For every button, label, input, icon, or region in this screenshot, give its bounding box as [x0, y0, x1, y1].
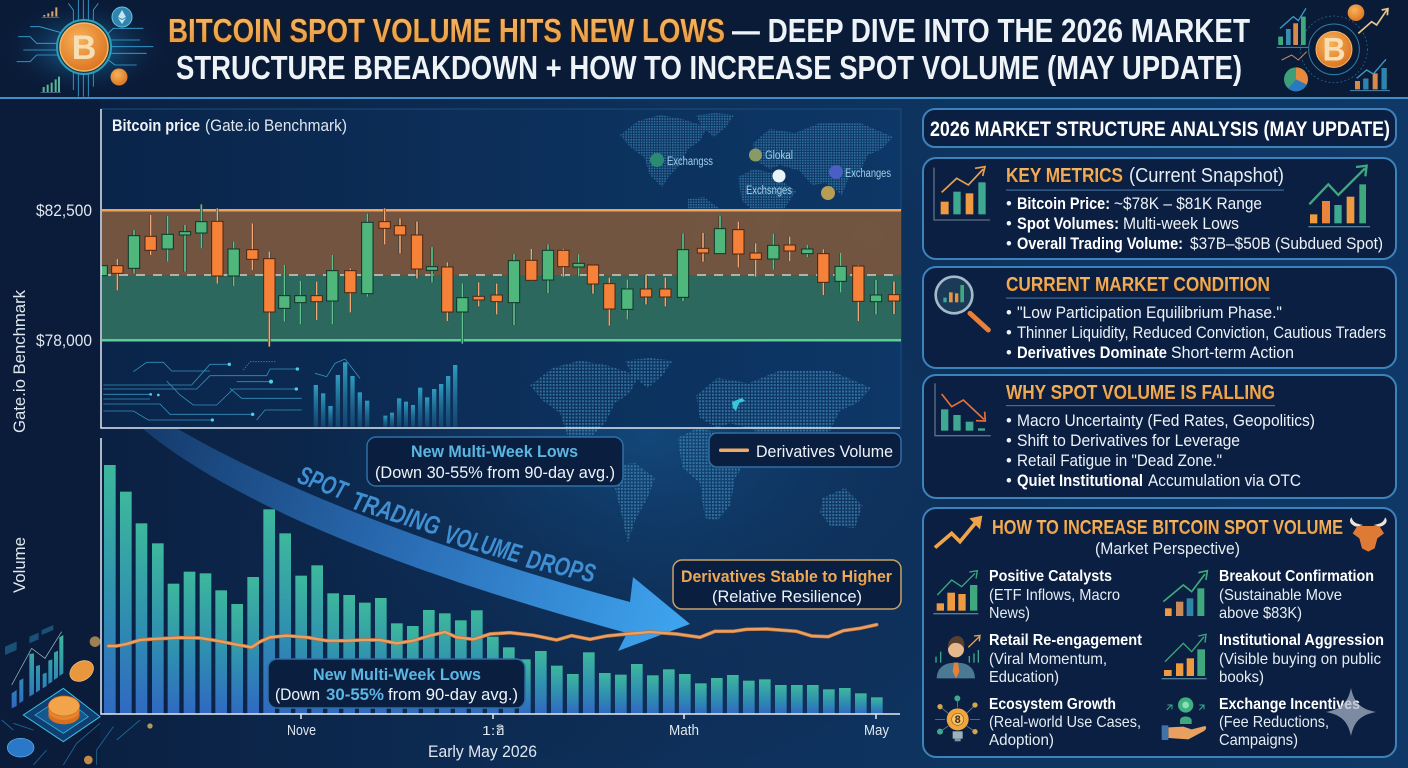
heading: KEY METRICS: [1006, 165, 1123, 187]
header icon: bitcoin and analytics: B: [1322, 32, 1346, 68]
price axis labels: [10, 201, 92, 433]
callout: new multi-week lows, lower: 30-55%: [326, 686, 384, 704]
line: derivatives volume: [108, 625, 877, 647]
reason lines: Macro Uncertainty (Fed Rates, Geopolitics): [1017, 412, 1315, 430]
metric lines: Bitcoin Price:: [1017, 195, 1110, 213]
dotted world map with exchange markers: Exchsnges: [746, 185, 792, 197]
title: BITCOIN SPOT VOLUME HITS NEW LOWS: [168, 12, 725, 49]
item: positive catalysts: (ETF Inflows, Macro: [989, 587, 1120, 604]
heading: CURRENT MARKET CONDITION: [1006, 274, 1270, 296]
item: institutional aggression: (Visible buying on public: [1219, 651, 1381, 668]
metric lines: [1006, 195, 1383, 253]
condition lines: •: [1006, 344, 1012, 362]
dotted world map with exchange markers: Glokal: [765, 150, 793, 162]
item: exchange incentives: (Fee Reductions,: [1219, 714, 1329, 731]
metric lines: ~$78K – $81K Range: [1114, 195, 1262, 213]
reason lines: [1006, 412, 1315, 490]
item: retail re-engagement: Education): [989, 669, 1059, 686]
panel: why spot volume is falling: [923, 375, 1396, 498]
icon: rising bar chart: [934, 167, 990, 220]
legend: derivatives volume: [709, 433, 901, 467]
item: positive catalysts: Positive Catalysts: [989, 568, 1112, 585]
dotted world map with exchange markers: Exchangss: [667, 156, 713, 168]
circuit traces and mini bars: [103, 359, 457, 427]
condition lines: •: [1006, 304, 1012, 322]
metric lines: •: [1006, 195, 1012, 213]
condition lines: [1006, 304, 1386, 362]
icon: bull: [1350, 517, 1387, 552]
callout: new multi-week lows, upper: [367, 437, 623, 486]
chart heading: [112, 117, 347, 135]
item: ecosystem growth: Ecosystem Growth: [989, 696, 1116, 713]
icon: magnifier: [936, 277, 988, 330]
metric lines: $37B–$50B (Subdued Spot): [1190, 235, 1383, 253]
heading: [1006, 165, 1284, 191]
icon: falling bars: [935, 383, 991, 436]
metric lines: Multi-week Lows: [1123, 215, 1239, 233]
item: ecosystem growth: [935, 695, 1141, 749]
item: exchange incentives: Campaigns): [1219, 732, 1298, 749]
x axis labels: Nove: [287, 723, 316, 739]
callout: derivatives stable to higher: [673, 560, 901, 609]
header icon: bitcoin circuit: [0, 0, 170, 97]
item: ecosystem growth: 8: [955, 714, 961, 726]
x axis labels: [287, 723, 890, 761]
item: retail re-engagement: (Viral Momentum,: [989, 651, 1107, 668]
chart heading: (Gate.io Benchmark): [205, 117, 347, 135]
reason lines: •: [1006, 452, 1012, 470]
item: retail re-engagement: [936, 632, 1143, 686]
item: exchange incentives: Exchange Incentives: [1219, 696, 1360, 713]
callout: new multi-week lows, lower: (Down: [275, 686, 320, 704]
reason lines: •: [1006, 412, 1012, 430]
bar chart: spot volume: [101, 438, 900, 719]
price axis labels: $78,000: [36, 331, 92, 350]
item: institutional aggression: Institutional Aggression: [1219, 632, 1384, 649]
price axis labels: Gate.io Benchmark: [10, 290, 29, 433]
x axis labels: Math: [669, 723, 699, 739]
decoration: crypto chip illustration: [2, 625, 153, 765]
dotted world map with exchange markers: [620, 113, 893, 261]
x axis labels: Early May 2026: [428, 743, 537, 761]
item: retail re-engagement: Retail Re-engagement: [989, 632, 1143, 649]
reason lines: Retail Fatigue in "Dead Zone.": [1017, 452, 1222, 470]
callout: new multi-week lows, lower: [268, 659, 525, 708]
x axis labels: May: [864, 723, 890, 739]
arrow label: spot trading volume drops: DROPS: [524, 544, 599, 589]
metric lines: •: [1006, 235, 1012, 253]
panel: bitcoin price chart: [101, 109, 901, 428]
arrow label: spot trading volume drops: SPOT: [294, 460, 353, 506]
icon: green trend bars: [1308, 166, 1370, 227]
reason lines: •: [1006, 432, 1012, 450]
item: breakout confirmation: Breakout Confirmation: [1219, 568, 1374, 585]
condition lines: •: [1006, 324, 1012, 342]
world map background, lower: [530, 358, 871, 543]
item: breakout confirmation: above $83K): [1219, 605, 1302, 622]
condition lines: Short-term Action: [1171, 344, 1294, 362]
item: positive catalysts: [933, 568, 1120, 622]
item: breakout confirmation: (Sustainable Move: [1219, 587, 1342, 604]
chart heading: Bitcoin price: [112, 117, 200, 135]
callout: new multi-week lows, upper: (Down 30-55% from 90-day avg.): [375, 464, 615, 482]
item: ecosystem growth: Adoption): [989, 732, 1054, 749]
heading: (Market Perspective): [1095, 540, 1240, 558]
reason lines: Shift to Derivatives for Leverage: [1017, 432, 1240, 450]
icon: sparkle: [1326, 688, 1376, 736]
heading: WHY SPOT VOLUME IS FALLING: [1006, 382, 1275, 404]
callout: new multi-week lows, upper: New Multi-Week Lows: [411, 443, 578, 461]
panel: market structure heading: [923, 109, 1396, 147]
price bands: [102, 209, 901, 342]
reason lines: •: [1006, 472, 1012, 490]
item: institutional aggression: [1162, 632, 1384, 686]
price axis labels: $82,500: [36, 201, 92, 220]
panel: key metrics: [923, 158, 1396, 259]
arrow label: spot trading volume drops: [294, 460, 599, 589]
callout: derivatives stable to higher: Derivatives Stable to Higher: [681, 567, 892, 586]
panel: current market condition: [923, 267, 1396, 368]
candlesticks: [101, 204, 900, 347]
callout: new multi-week lows, lower: from 90-day avg.): [388, 686, 518, 704]
metric lines: Overall Trading Volume:: [1017, 235, 1183, 253]
arrow label: spot trading volume drops: VOLUME: [441, 519, 525, 569]
callout: new multi-week lows, lower: New Multi-Week Lows: [313, 666, 481, 684]
metric lines: Spot Volumes:: [1017, 215, 1119, 233]
heading: (Current Snapshot): [1129, 165, 1284, 187]
volume axis label: Volume: [10, 537, 29, 593]
item: positive catalysts: News): [989, 605, 1030, 622]
header icon: bitcoin and analytics: [1277, 4, 1390, 91]
dotted world map with exchange markers: Exchanges: [845, 168, 891, 180]
item: institutional aggression: books): [1219, 669, 1264, 686]
reason lines: Accumulation via OTC: [1148, 472, 1301, 490]
arrow label: spot trading volume drops: TRADING: [348, 485, 444, 541]
item: ecosystem growth: (Real-world Use Cases,: [989, 714, 1141, 731]
item: breakout confirmation: [1163, 568, 1374, 622]
arrow: spot trading volume drops: [143, 429, 690, 651]
panel: how to increase bitcoin spot volume: [923, 508, 1396, 757]
x axis labels: 1:ฮิ: [482, 723, 505, 738]
title: [168, 12, 1250, 86]
reason lines: Quiet Institutional: [1017, 472, 1143, 490]
metric lines: •: [1006, 215, 1012, 233]
condition lines: "Low Participation Equilibrium Phase.": [1017, 304, 1282, 322]
icon: rising arrow: [935, 516, 982, 548]
condition lines: Derivatives Dominate: [1017, 344, 1167, 362]
title: — DEEP DIVE INTO THE 2026 MARKET: [732, 12, 1250, 49]
header icon: bitcoin circuit: B: [72, 29, 96, 67]
legend: derivatives volume: Derivatives Volume: [756, 443, 893, 461]
item: exchange incentives: [1162, 696, 1360, 749]
heading: [992, 517, 1343, 558]
callout: derivatives stable to higher: (Relative Resilience): [712, 587, 862, 606]
